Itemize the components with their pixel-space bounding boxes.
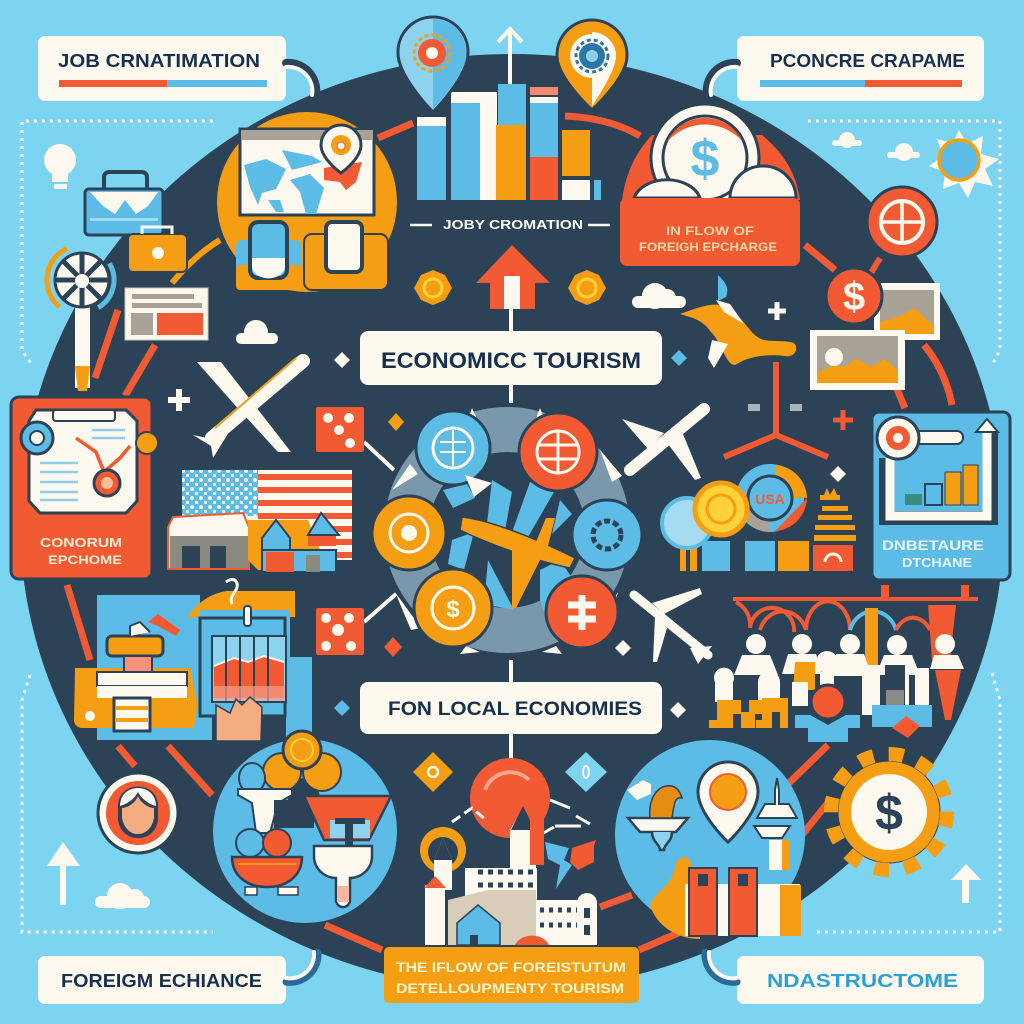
- icon: coins and pie chart: [662, 464, 809, 571]
- panel: city circle: [615, 740, 805, 939]
- label: infrastructure: NDASTRUCTOME: [767, 971, 958, 991]
- icon: dollar badge: $: [843, 275, 865, 319]
- icon: airplane right lower: [634, 588, 712, 664]
- corner connectors: [286, 63, 737, 982]
- orbit ring segments: [67, 116, 952, 950]
- icon: central airplane: [460, 517, 575, 608]
- panel: town illustration: [420, 758, 597, 945]
- panel: consumer exchange: EPCHOME: [48, 553, 122, 567]
- hub icon: orange dollar: $: [446, 596, 460, 623]
- plus near bird: [768, 302, 786, 320]
- label: infrastructure: [737, 956, 984, 1004]
- up arrow top: [498, 29, 522, 95]
- icon: red wind turbine: [724, 362, 828, 457]
- icon: wind turbine: [33, 231, 131, 391]
- hub icon: red circle: [519, 413, 597, 491]
- panel: departure exchange: DNBETAURE: [882, 537, 984, 553]
- icon: dollar badge: [826, 268, 882, 324]
- banner: development tourism: THE IFLOW OF FOREISTUTUM: [396, 959, 626, 975]
- label: top right: [737, 36, 984, 101]
- panel: bowls circle: [213, 731, 397, 923]
- panel: world map: [217, 112, 397, 292]
- label: foreign exchange: FOREIGM ECHIANCE: [61, 971, 262, 991]
- label: job creation: [38, 36, 286, 101]
- heading: local economies: FON LOCAL ECONOMIES: [388, 699, 642, 720]
- central hub globe: [384, 407, 630, 654]
- hub icon: red plus: [546, 576, 618, 648]
- icon: up arrow lower right: [951, 864, 981, 903]
- illustration: crowd: [709, 634, 964, 742]
- panel: inflow of foreign exchange: FOREIGH EPCHARGE: [639, 240, 777, 254]
- plus left: [168, 389, 190, 411]
- icon: airplane left: [193, 358, 303, 458]
- icon: gear dollar: $: [875, 785, 903, 841]
- panel: consumer exchange: CONORUM: [40, 535, 122, 550]
- icon: small diamonds: [413, 752, 607, 792]
- label: top right: PCONCRE CRAPAME: [770, 51, 965, 71]
- icon: up arrow lower left: [47, 842, 80, 905]
- label: foreign exchange: [38, 956, 286, 1004]
- heading: local economies: [360, 682, 662, 734]
- orange arc: [172, 240, 220, 283]
- icon: document card: [125, 288, 208, 340]
- map pin orange: [557, 20, 627, 110]
- banner: development tourism: DETELLOUPMENTY TOURISM: [396, 980, 624, 996]
- houses: [168, 513, 339, 572]
- illustration: bridge arches: [733, 585, 978, 676]
- hub icon: orange coin left: [372, 496, 446, 570]
- panel: inflow of foreign exchange: [620, 104, 800, 266]
- label: job creation: JOB CRNATIMATION: [58, 51, 260, 71]
- icon: red up arrow: [476, 245, 550, 309]
- icon: target circle top right: [862, 187, 937, 288]
- icon: red dice top: [316, 407, 364, 452]
- heading: economic tourism: [360, 331, 662, 385]
- icon: golden bird: [680, 275, 796, 368]
- panel: departure exchange: [872, 412, 1010, 580]
- icon: coins and pie chart: USA: [755, 491, 785, 507]
- panel: factory and chart: [74, 580, 312, 741]
- panel: consumer exchange: [11, 397, 158, 579]
- diamonds around centre: [334, 350, 846, 718]
- panel: departure exchange: DTCHANE: [902, 555, 972, 570]
- caption: job creation: JOBY CROMATION: [443, 217, 583, 232]
- flags near town: [545, 840, 596, 889]
- icon: sun: [929, 130, 999, 198]
- icon: red dice bottom: [316, 608, 364, 655]
- icon: airplane right upper: [622, 409, 704, 480]
- connector lines: [364, 308, 511, 762]
- plus red: [833, 410, 853, 430]
- icon: orange bag: [128, 227, 187, 272]
- hub icon: orange dollar: [414, 569, 492, 647]
- bar chart: [417, 84, 601, 200]
- icon: cloud left: [236, 320, 278, 344]
- icon: folder front: [810, 330, 905, 390]
- hub icon: blue gear right: [572, 500, 642, 570]
- panel: inflow of foreign exchange: IN FLOW OF: [666, 224, 754, 238]
- icon: small tower: [813, 488, 856, 571]
- icon: small coins top: [414, 270, 606, 305]
- dotted frames: [22, 121, 1000, 932]
- heading: economic tourism: ECONOMICC TOURISM: [381, 348, 641, 373]
- flag: [182, 470, 352, 560]
- panel: inflow of foreign exchange: $: [691, 130, 720, 188]
- icons: clouds top right: [832, 132, 920, 161]
- map pin blue: [398, 17, 468, 112]
- icon: folder back: [874, 283, 940, 340]
- banner: development tourism: [384, 947, 639, 1003]
- small grey ticks: [748, 404, 802, 411]
- icon: cloud lower left: [95, 883, 150, 909]
- icon: cloud right: [632, 283, 686, 309]
- icon: person badge: [98, 773, 178, 853]
- hub icon: blue globe: [416, 411, 492, 497]
- icon: light bulb: [44, 144, 76, 189]
- icon: gear dollar: [831, 754, 947, 870]
- icon: briefcase: [85, 172, 163, 235]
